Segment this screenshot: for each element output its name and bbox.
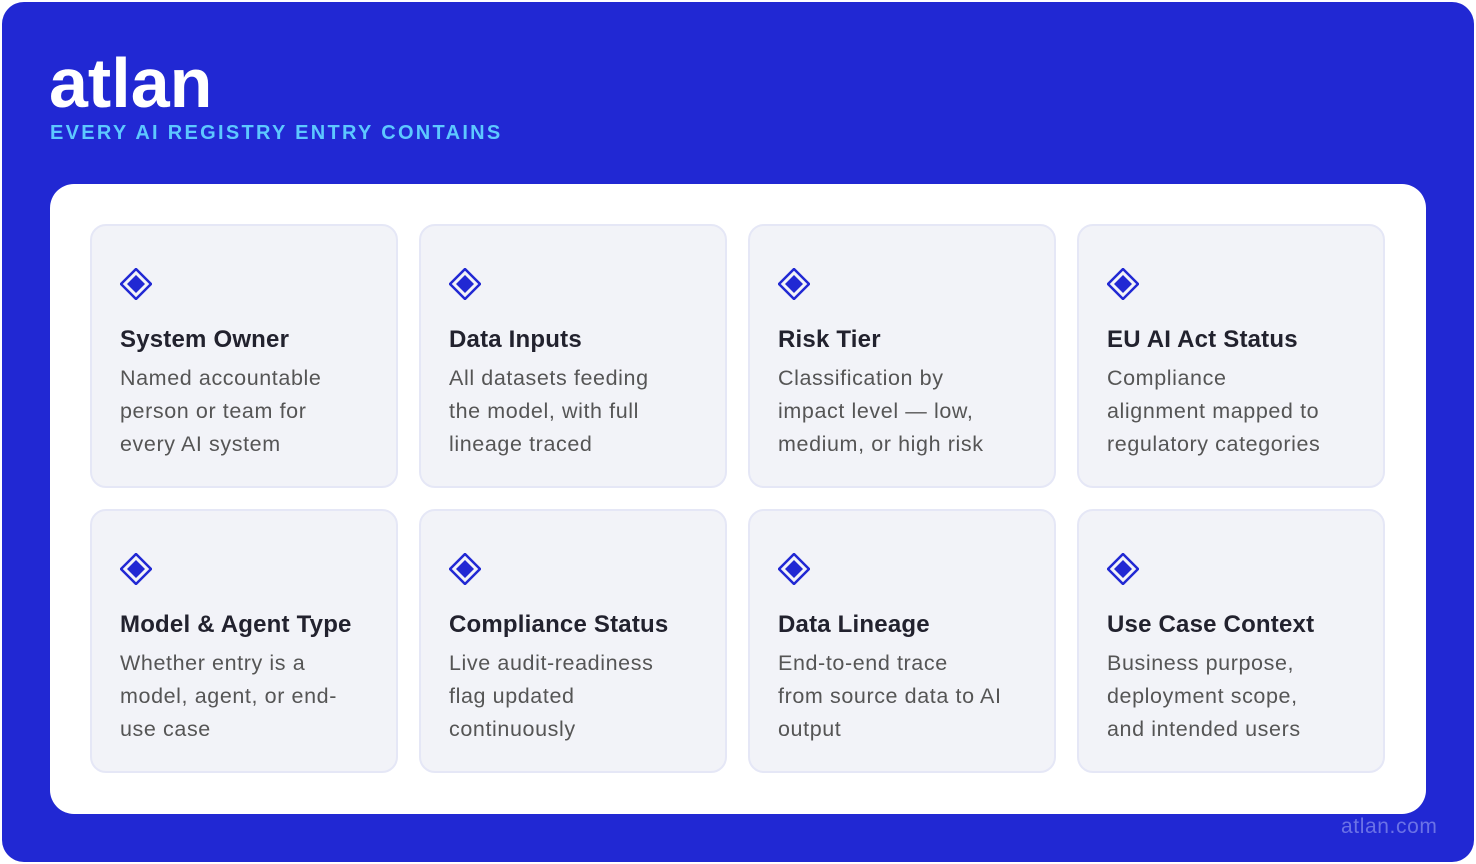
card: Data Lineage: [748, 509, 1056, 773]
card: System Owner: every AI system: [120, 432, 281, 456]
card: Risk Tier: [748, 224, 1056, 488]
card: Model & Agent Type: Model & Agent Type: [120, 611, 352, 638]
card: Data Inputs: [419, 224, 727, 488]
card: Compliance Status: [419, 509, 727, 773]
card: Compliance Status: Live audit-readiness: [449, 651, 653, 675]
card: Risk Tier: impact level — low,: [778, 399, 973, 423]
card: Use Case Context: deployment scope,: [1107, 684, 1298, 708]
subtitle: EVERY AI REGISTRY ENTRY CONTAINS: [50, 122, 503, 144]
footer: atlan.com: atlan.com: [1341, 815, 1437, 838]
card: Data Lineage: output: [778, 717, 841, 741]
card: EU AI Act Status: Compliance: [1107, 366, 1227, 390]
card: EU AI Act Status: regulatory categories: [1107, 432, 1320, 456]
card: EU AI Act Status: [1077, 224, 1385, 488]
card: System Owner: Named accountable: [120, 366, 321, 390]
card: Risk Tier: Risk Tier: [778, 326, 881, 353]
card: Data Inputs: lineage traced: [449, 432, 592, 456]
card: EU AI Act Status: EU AI Act Status: [1107, 326, 1298, 353]
card: Compliance Status: flag updated: [449, 684, 575, 708]
card: Data Inputs: All datasets feeding: [449, 366, 649, 390]
card: Model & Agent Type: model, agent, or end-: [120, 684, 337, 708]
card: Data Inputs: Data Inputs: [449, 326, 582, 353]
card: Model & Agent Type: Whether entry is a: [120, 651, 305, 675]
logo: atlan: atlan: [49, 44, 212, 122]
card: Compliance Status: continuously: [449, 717, 576, 741]
card: Risk Tier: Classification by: [778, 366, 944, 390]
card: System Owner: person or team for: [120, 399, 306, 423]
card: Model & Agent Type: use case: [120, 717, 211, 741]
card: System Owner: [90, 224, 398, 488]
card: Data Inputs: the model, with full: [449, 399, 639, 423]
card: System Owner: System Owner: [120, 326, 289, 353]
card: Use Case Context: [1077, 509, 1385, 773]
card: Data Lineage: from source data to AI: [778, 684, 1002, 708]
card: Risk Tier: medium, or high risk: [778, 432, 984, 456]
card: Data Lineage: Data Lineage: [778, 611, 930, 638]
card: Use Case Context: Use Case Context: [1107, 611, 1314, 638]
card: Use Case Context: and intended users: [1107, 717, 1301, 741]
card: Use Case Context: Business purpose,: [1107, 651, 1294, 675]
card: EU AI Act Status: alignment mapped to: [1107, 399, 1319, 423]
panel: registry entries: [50, 184, 1426, 814]
card: Model & Agent Type: [90, 509, 398, 773]
card: Data Lineage: End-to-end trace: [778, 651, 948, 675]
card: Compliance Status: Compliance Status: [449, 611, 668, 638]
